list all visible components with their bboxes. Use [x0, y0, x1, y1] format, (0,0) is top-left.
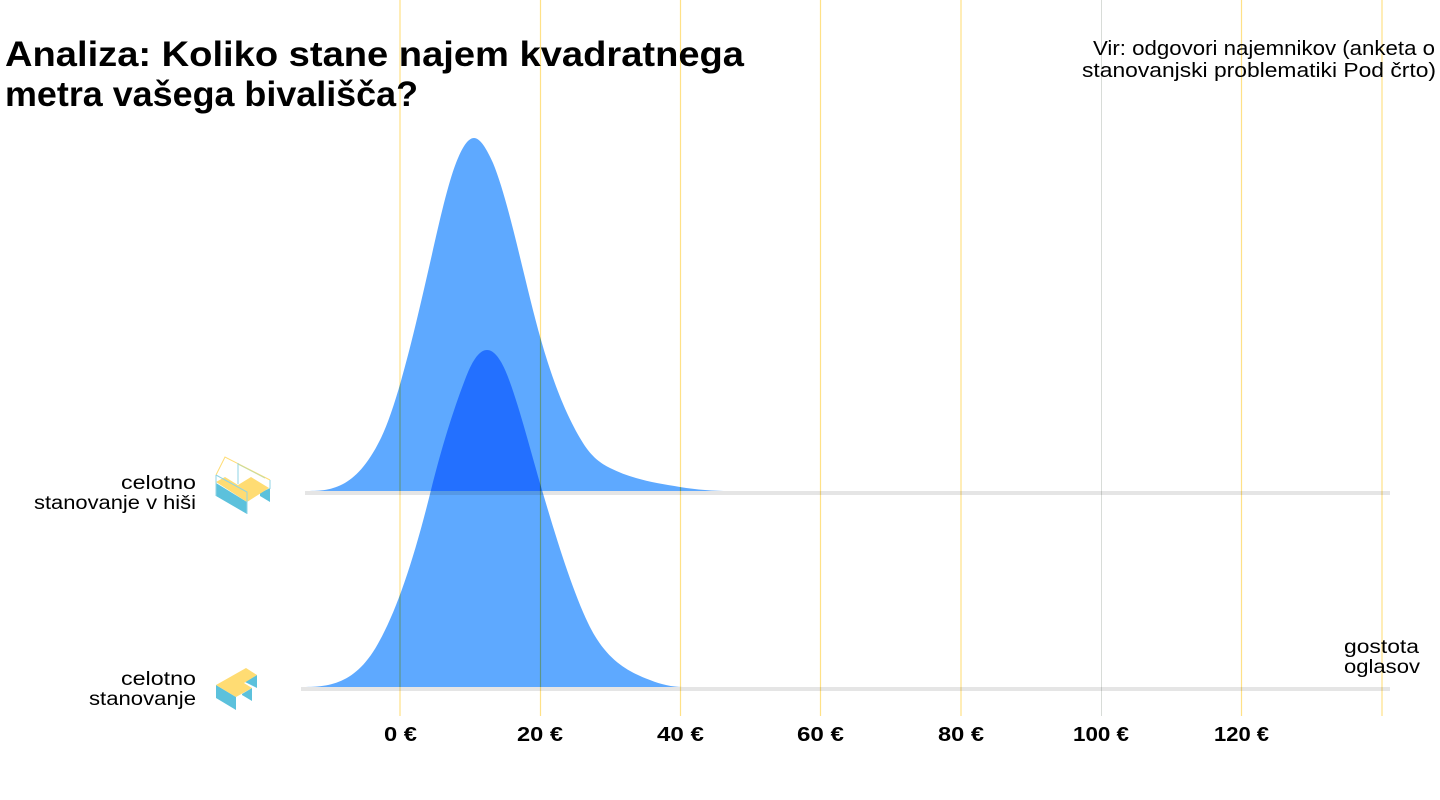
baseline: celotno stanovanje: [301, 687, 1390, 691]
title: metra vašega bivališča?: [5, 75, 418, 114]
density axis label: gostota: [1344, 637, 1420, 658]
icon: apartment: [216, 668, 257, 710]
label: celotno stanovanje: stanovanje: [89, 689, 196, 710]
label: celotno stanovanje v hiši: [34, 473, 196, 514]
label: celotno stanovanje: celotno: [121, 669, 196, 690]
density curve: celotno stanovanje: [301, 350, 683, 687]
label: celotno stanovanje v hiši: celotno: [121, 473, 196, 494]
x axis labels: 40 €: [657, 724, 704, 746]
x axis labels: [384, 724, 1269, 746]
baseline: celotno stanovanje v hiši: [305, 491, 1390, 495]
x axis labels: 120 €: [1214, 724, 1269, 746]
source note: [1082, 38, 1436, 82]
density curve: celotno stanovanje v hiši: [305, 138, 730, 491]
title: [5, 35, 745, 114]
x axis labels: 0 €: [384, 724, 417, 746]
density axis label: oglasov: [1344, 657, 1421, 678]
density axis label: [1344, 637, 1421, 678]
label: celotno stanovanje v hiši: stanovanje v hiši: [34, 493, 196, 514]
x axis labels: 100 €: [1073, 724, 1129, 746]
label: celotno stanovanje: [89, 669, 196, 710]
source note: stanovanjski problematiki Pod črto): [1082, 60, 1436, 82]
x axis labels: 20 €: [517, 724, 563, 746]
x axis labels: 60 €: [797, 724, 844, 746]
title: Analiza: Koliko stane najem kvadratnega: [5, 35, 745, 74]
x axis labels: 80 €: [938, 724, 984, 746]
source note: Vir: odgovori najemnikov (anketa o: [1093, 38, 1435, 60]
icon: house: [216, 457, 270, 514]
